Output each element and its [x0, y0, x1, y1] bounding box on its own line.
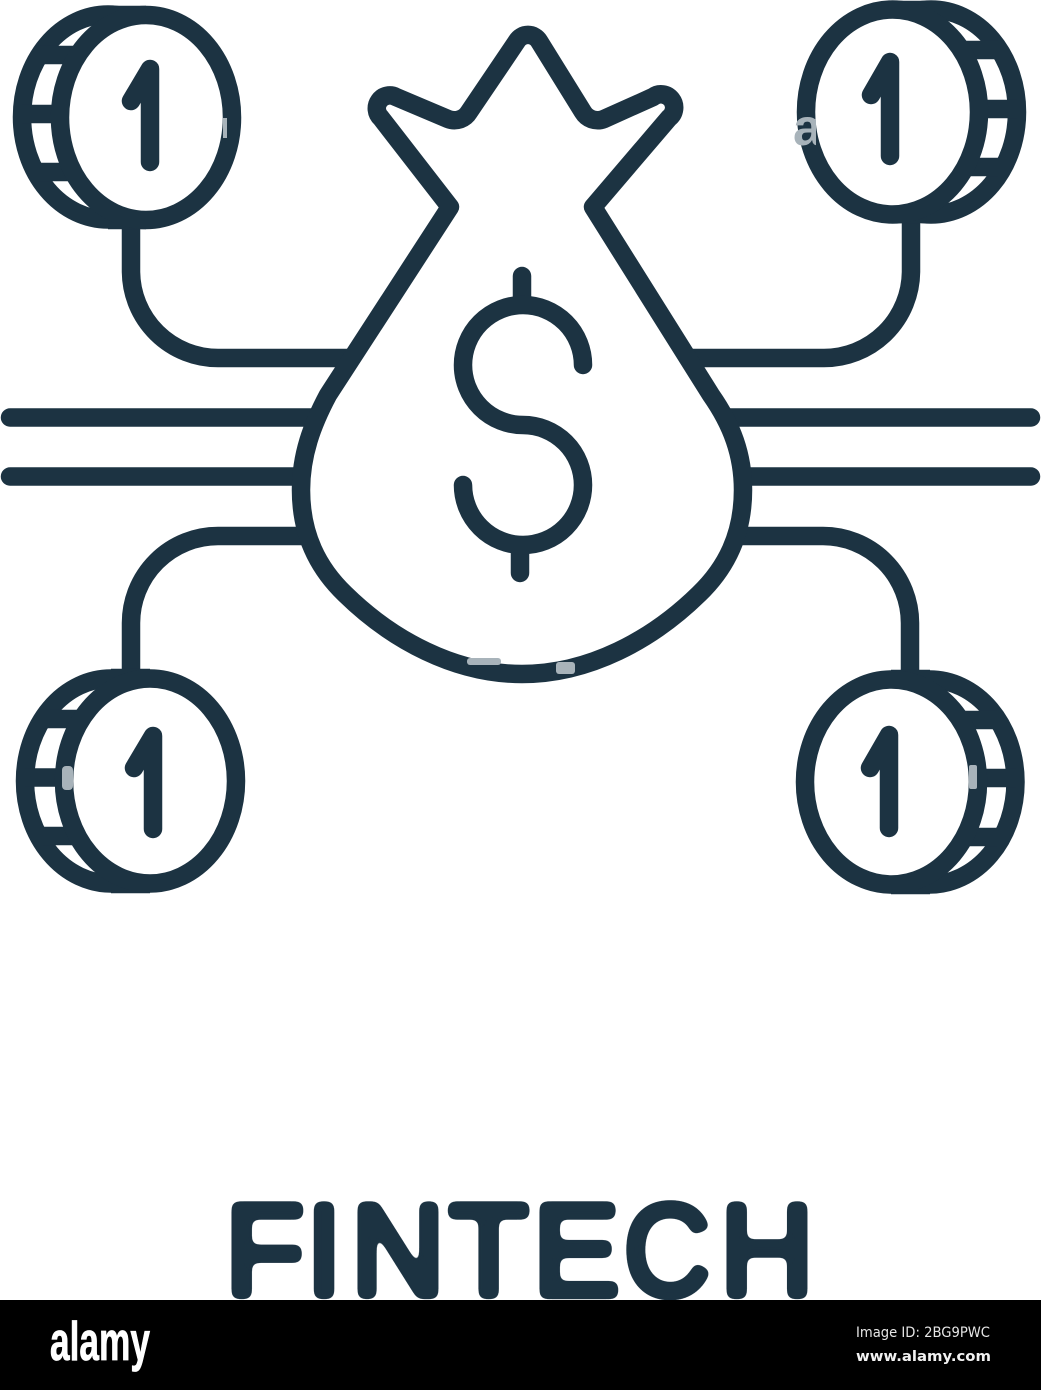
- image id: Image ID: 2BG9PWC: [856, 1325, 990, 1341]
- title: FINTE: [225, 1177, 620, 1323]
- watermark fragments: a: [793, 99, 823, 157]
- website: www.alamy.com: [856, 1349, 991, 1365]
- brand logo: alamy: [50, 1310, 150, 1372]
- footer bar: [0, 1300, 1041, 1390]
- icon: coin bottom right: [805, 679, 1016, 885]
- title: [225, 1177, 814, 1323]
- title: H: [720, 1177, 814, 1323]
- icon: coin top right: [806, 10, 1017, 214]
- watermark fragments: [62, 99, 977, 790]
- icon: money bag: [301, 35, 743, 674]
- icon: coin top left: [22, 14, 232, 220]
- title: C: [624, 1178, 710, 1323]
- connector lines from coins and bars to money bag: [10, 220, 1031, 672]
- icon: dollar sign: [463, 276, 583, 573]
- icon: coin bottom left: [25, 678, 236, 884]
